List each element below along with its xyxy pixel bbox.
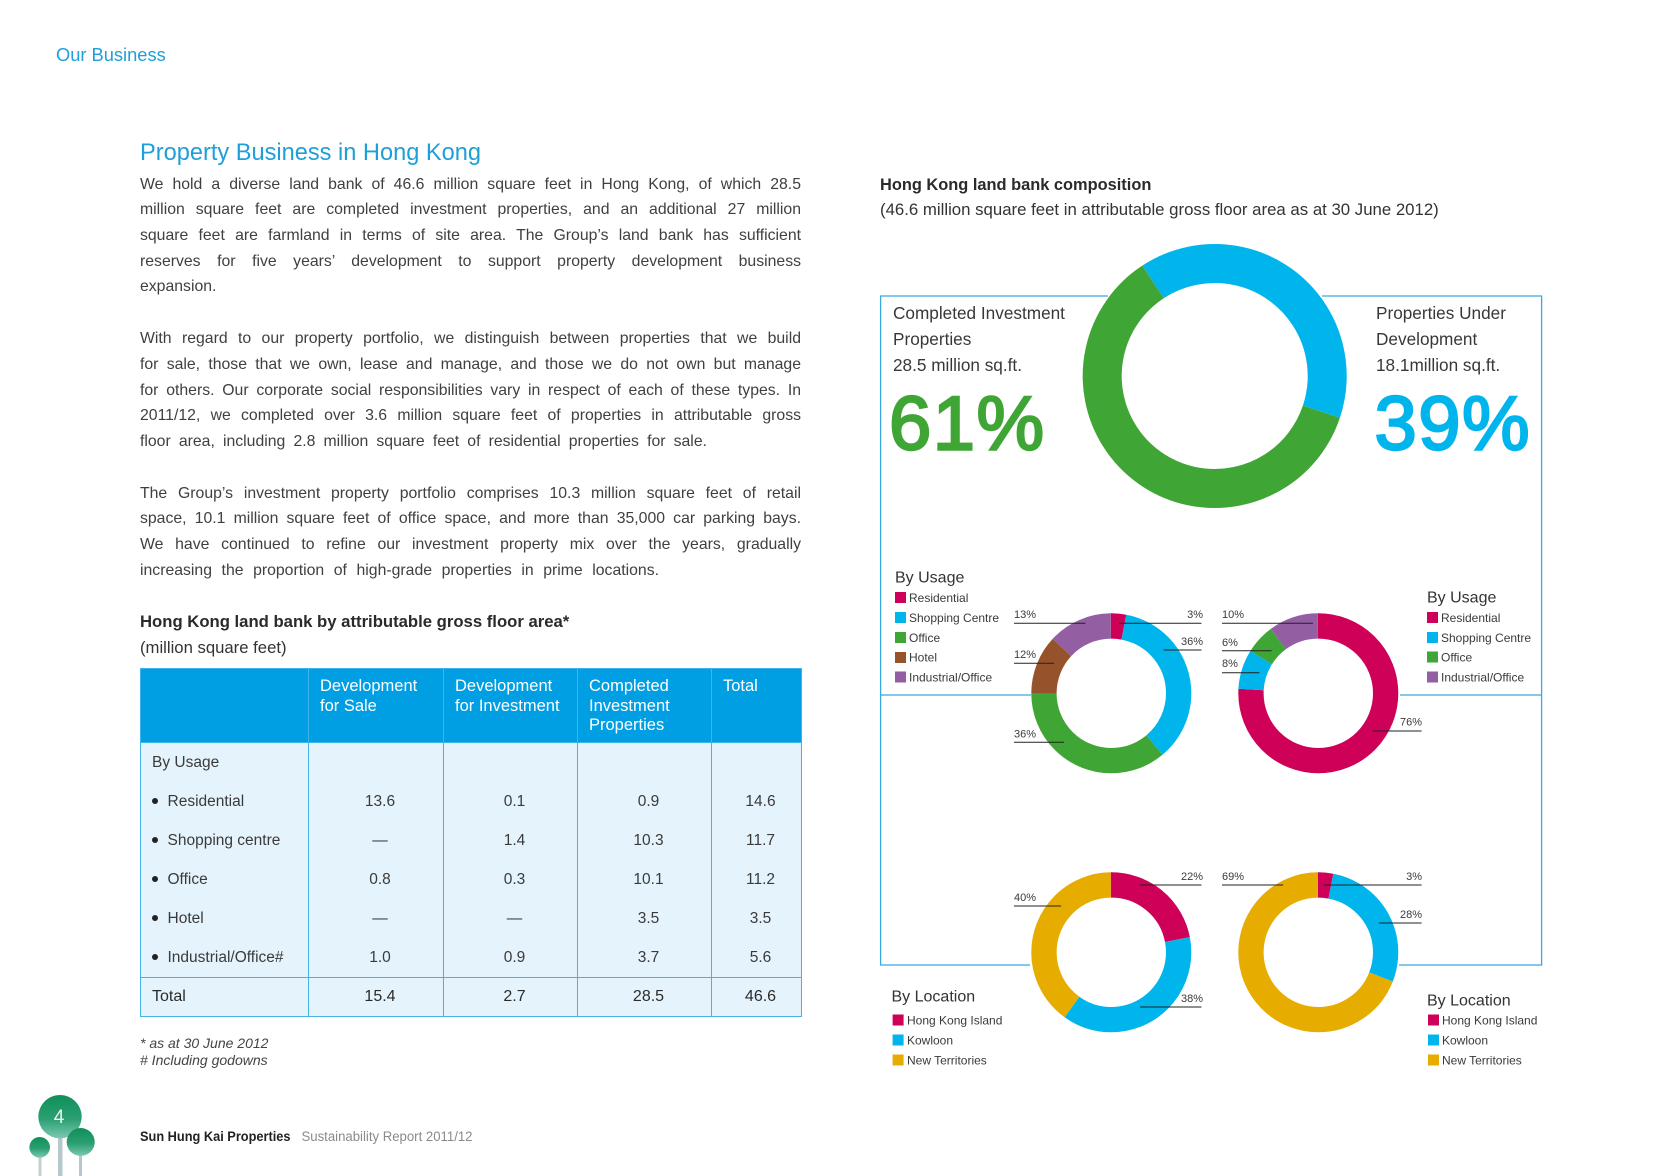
icon: trees with page number bbox=[29, 1095, 95, 1176]
text block: property portfolio paragraph: for sale, those that we own, lease and manage, and those we do not own but manage bbox=[140, 356, 801, 373]
donut chart: completed investment by usage: 3% bbox=[1187, 609, 1203, 621]
table: land bank by attributable gross floor area: Development bbox=[320, 677, 417, 695]
table: land bank by attributable gross floor area: Total bbox=[152, 988, 186, 1005]
legend: left by usage: By Usage bbox=[895, 570, 964, 586]
text block: land bank paragraph: square feet are farmland in terms of site area. The Group’s land bank has sufficient bbox=[140, 227, 801, 244]
donut chart: under development by location bbox=[1222, 871, 1422, 1020]
callout: properties under development bbox=[1374, 303, 1531, 466]
table: land bank by attributable gross floor area: 11.7 bbox=[746, 832, 775, 848]
table: land bank by attributable gross floor area: Total bbox=[723, 677, 758, 695]
donut chart: completed investment by usage bbox=[1014, 609, 1203, 761]
legend: right by usage: By Usage bbox=[1427, 590, 1496, 606]
table: land bank by attributable gross floor area: 3.5 bbox=[750, 910, 771, 926]
heading: Property Business in Hong Kong: Property Business in Hong Kong bbox=[140, 140, 481, 166]
legend: left by usage: Hotel bbox=[909, 650, 937, 664]
table: land bank by attributable gross floor area: 28.5 bbox=[633, 988, 664, 1005]
donut chart: under development by location: 28% bbox=[1400, 909, 1422, 921]
table: land bank by attributable gross floor area: — bbox=[372, 910, 388, 926]
donut chart: under development by usage bbox=[1222, 609, 1422, 761]
right column subheading: (46.6 million square feet in attributable gross floor area as at 30 June 2012) bbox=[880, 200, 1439, 218]
donut chart: completed investment by usage: 12% bbox=[1014, 649, 1036, 661]
table: land bank by attributable gross floor area: Office bbox=[168, 870, 208, 888]
table: land bank by attributable gross floor area: 10.3 bbox=[633, 832, 664, 848]
icon: trees with page number: 4 bbox=[54, 1107, 65, 1128]
text block: investment portfolio paragraph: space, 10.1 million square feet of office space, and more than 35,000 car parking bays. bbox=[140, 510, 801, 527]
table: land bank by attributable gross floor area: 13.6 bbox=[365, 792, 395, 810]
text block: land bank paragraph: reserves for five years’ development to support property development business bbox=[140, 253, 801, 270]
footer: report name: Sustainability Report 2011/12 bbox=[302, 1129, 472, 1144]
callout: completed investment properties: 61% bbox=[889, 382, 1046, 466]
table footnotes: * as at 30 June 2012 bbox=[140, 1035, 268, 1051]
table: land bank by attributable gross floor area: 10.1 bbox=[633, 870, 664, 888]
right column heading: Hong Kong land bank composition bbox=[880, 176, 1151, 194]
table: land bank by attributable gross floor area: 11.2 bbox=[746, 870, 775, 888]
donut chart: under development by usage: 8% bbox=[1222, 658, 1238, 670]
table: land bank by attributable gross floor area: 0.8 bbox=[369, 870, 391, 888]
text block: investment portfolio paragraph: The Group’s investment property portfolio comprises 10.3 million square feet of retail bbox=[140, 485, 801, 502]
table footnotes: # Including godowns bbox=[140, 1052, 268, 1068]
text block: property portfolio paragraph bbox=[140, 330, 801, 450]
table: land bank by attributable gross floor area: — bbox=[507, 910, 522, 926]
donut chart: under development by usage: 76% bbox=[1400, 716, 1422, 728]
table: land bank by attributable gross floor area: 1.0 bbox=[369, 948, 391, 966]
table: land bank by attributable gross floor area: Development bbox=[455, 677, 552, 695]
table: land bank by attributable gross floor area: Residential bbox=[168, 792, 244, 810]
table: land bank by attributable gross floor area: 0.9 bbox=[638, 792, 659, 810]
text block: investment portfolio paragraph: We have continued to refine our investment property mix over the years, gradually bbox=[140, 536, 801, 553]
legend: left by usage: Industrial/Office bbox=[909, 670, 992, 684]
table: land bank by attributable gross floor area: By Usage bbox=[152, 754, 219, 770]
donut chart: completed investment by usage: 36% bbox=[1181, 636, 1203, 648]
section label: Our Business: Our Business bbox=[56, 44, 166, 65]
table: land bank by attributable gross floor area: 46.6 bbox=[745, 988, 776, 1005]
table: land bank by attributable gross floor area: Properties bbox=[589, 716, 664, 734]
legend: right by location: By Location bbox=[1427, 992, 1511, 1010]
legend: left by usage: Residential bbox=[909, 591, 968, 605]
callout: completed investment properties: 28.5 million sq.ft. bbox=[893, 355, 1022, 375]
donut chart: completed investment by location: 22% bbox=[1181, 871, 1203, 883]
legend: right by usage bbox=[1427, 590, 1531, 684]
text block: land bank paragraph bbox=[140, 176, 801, 295]
donut chart: overall composition bbox=[1059, 220, 1370, 532]
donut chart: under development by location: 3% bbox=[1406, 871, 1422, 883]
donut chart: completed investment by location bbox=[1014, 871, 1203, 1020]
table: land bank by attributable gross floor area: for Investment bbox=[455, 697, 560, 715]
donut chart: completed investment by usage: 36% bbox=[1014, 728, 1036, 740]
table: land bank by attributable gross floor area: Industrial/Office# bbox=[168, 948, 284, 966]
donut chart: under development by usage: 6% bbox=[1222, 637, 1238, 649]
callout: completed investment properties: Completed Investment bbox=[893, 303, 1065, 323]
table footnotes bbox=[140, 1035, 268, 1068]
table: land bank by attributable gross floor area: 14.6 bbox=[745, 792, 776, 810]
text block: land bank paragraph: We hold a diverse land bank of 46.6 million square feet in Hong Kong, of which 28.5 bbox=[140, 176, 801, 193]
table: land bank by attributable gross floor area: 3.5 bbox=[638, 910, 659, 926]
legend: left by location: By Location bbox=[892, 988, 975, 1006]
table: land bank by attributable gross floor area: Hotel bbox=[168, 910, 204, 926]
callout: completed investment properties: Properties bbox=[893, 329, 971, 349]
legend: left by location: Kowloon bbox=[907, 1034, 953, 1048]
legend: right by location: New Territories bbox=[1442, 1054, 1522, 1068]
callout: properties under development: Properties Under bbox=[1376, 303, 1506, 323]
table: land bank by attributable gross floor area: Investment bbox=[589, 697, 670, 715]
text block: property portfolio paragraph: floor area, including 2.8 million square feet of residential properties for sale. bbox=[140, 433, 707, 450]
legend: right by usage: Office bbox=[1441, 650, 1472, 664]
text block: property portfolio paragraph: With regard to our property portfolio, we distinguish between properties that we build bbox=[140, 330, 801, 347]
text block: land bank paragraph: million square feet are completed investment properties, and an additional 27 million bbox=[140, 201, 801, 218]
donut chart: under development by location: 69% bbox=[1222, 871, 1244, 883]
table: land bank by attributable gross floor area: 0.3 bbox=[504, 870, 525, 888]
text block: investment portfolio paragraph bbox=[140, 485, 801, 579]
table: land bank by attributable gross floor area: 1.4 bbox=[504, 832, 525, 848]
legend: left by location: New Territories bbox=[907, 1054, 987, 1068]
donut chart: completed investment by location: 40% bbox=[1014, 892, 1036, 904]
text block: property portfolio paragraph: for others. Our corporate social responsibilities vary in respect of each of these types. In bbox=[140, 382, 801, 399]
table: land bank by attributable gross floor area: 15.4 bbox=[364, 988, 396, 1005]
table unit note: (million square feet) bbox=[140, 638, 287, 657]
legend: right by location: Kowloon bbox=[1442, 1034, 1488, 1048]
donut chart: completed investment by usage: 13% bbox=[1014, 609, 1036, 621]
table: land bank by attributable gross floor area: 3.7 bbox=[638, 948, 659, 966]
donut chart: completed investment by location: 38% bbox=[1181, 993, 1203, 1005]
table: land bank by attributable gross floor area: 0.9 bbox=[504, 948, 525, 966]
legend: right by location: Hong Kong Island bbox=[1442, 1014, 1537, 1028]
table: land bank by attributable gross floor area: — bbox=[372, 832, 388, 848]
legend: left by location bbox=[892, 988, 1002, 1068]
table: land bank by attributable gross floor area: for Sale bbox=[320, 697, 377, 715]
callout: properties under development: 18.1million sq.ft. bbox=[1376, 355, 1500, 375]
legend: left by usage bbox=[895, 570, 999, 684]
table: land bank by attributable gross floor area: Shopping centre bbox=[168, 832, 280, 848]
legend: right by usage: Residential bbox=[1441, 611, 1500, 625]
legend: right by usage: Industrial/Office bbox=[1441, 670, 1524, 684]
table: land bank by attributable gross floor area: 2.7 bbox=[503, 988, 526, 1005]
text block: land bank paragraph: expansion. bbox=[140, 278, 216, 295]
table: land bank by attributable gross floor area: 5.6 bbox=[750, 948, 771, 966]
legend: right by usage: Shopping Centre bbox=[1441, 631, 1531, 645]
donut chart: under development by usage: 10% bbox=[1222, 609, 1244, 621]
table: land bank by attributable gross floor area: 0.1 bbox=[504, 792, 525, 810]
legend: left by usage: Shopping Centre bbox=[909, 611, 999, 625]
callout: completed investment properties bbox=[889, 303, 1065, 466]
legend: left by location: Hong Kong Island bbox=[907, 1014, 1002, 1028]
legend: left by usage: Office bbox=[909, 631, 940, 645]
callout: properties under development: Development bbox=[1376, 329, 1477, 349]
footer: report name bbox=[140, 1129, 472, 1144]
table: land bank by attributable gross floor area: Completed bbox=[589, 677, 669, 695]
callout: properties under development: 39% bbox=[1374, 382, 1531, 466]
table: land bank by attributable gross floor area bbox=[140, 668, 802, 1017]
text block: investment portfolio paragraph: increasing the proportion of high-grade properties in prime locations. bbox=[140, 562, 659, 579]
legend: right by location bbox=[1427, 992, 1537, 1068]
text block: property portfolio paragraph: 2011/12, we completed over 3.6 million square feet of properties in attributable gross bbox=[140, 407, 801, 424]
table heading: Hong Kong land bank by attributable gross floor area* bbox=[140, 612, 569, 631]
footer: report name: Sun Hung Kai Properties bbox=[140, 1129, 290, 1144]
